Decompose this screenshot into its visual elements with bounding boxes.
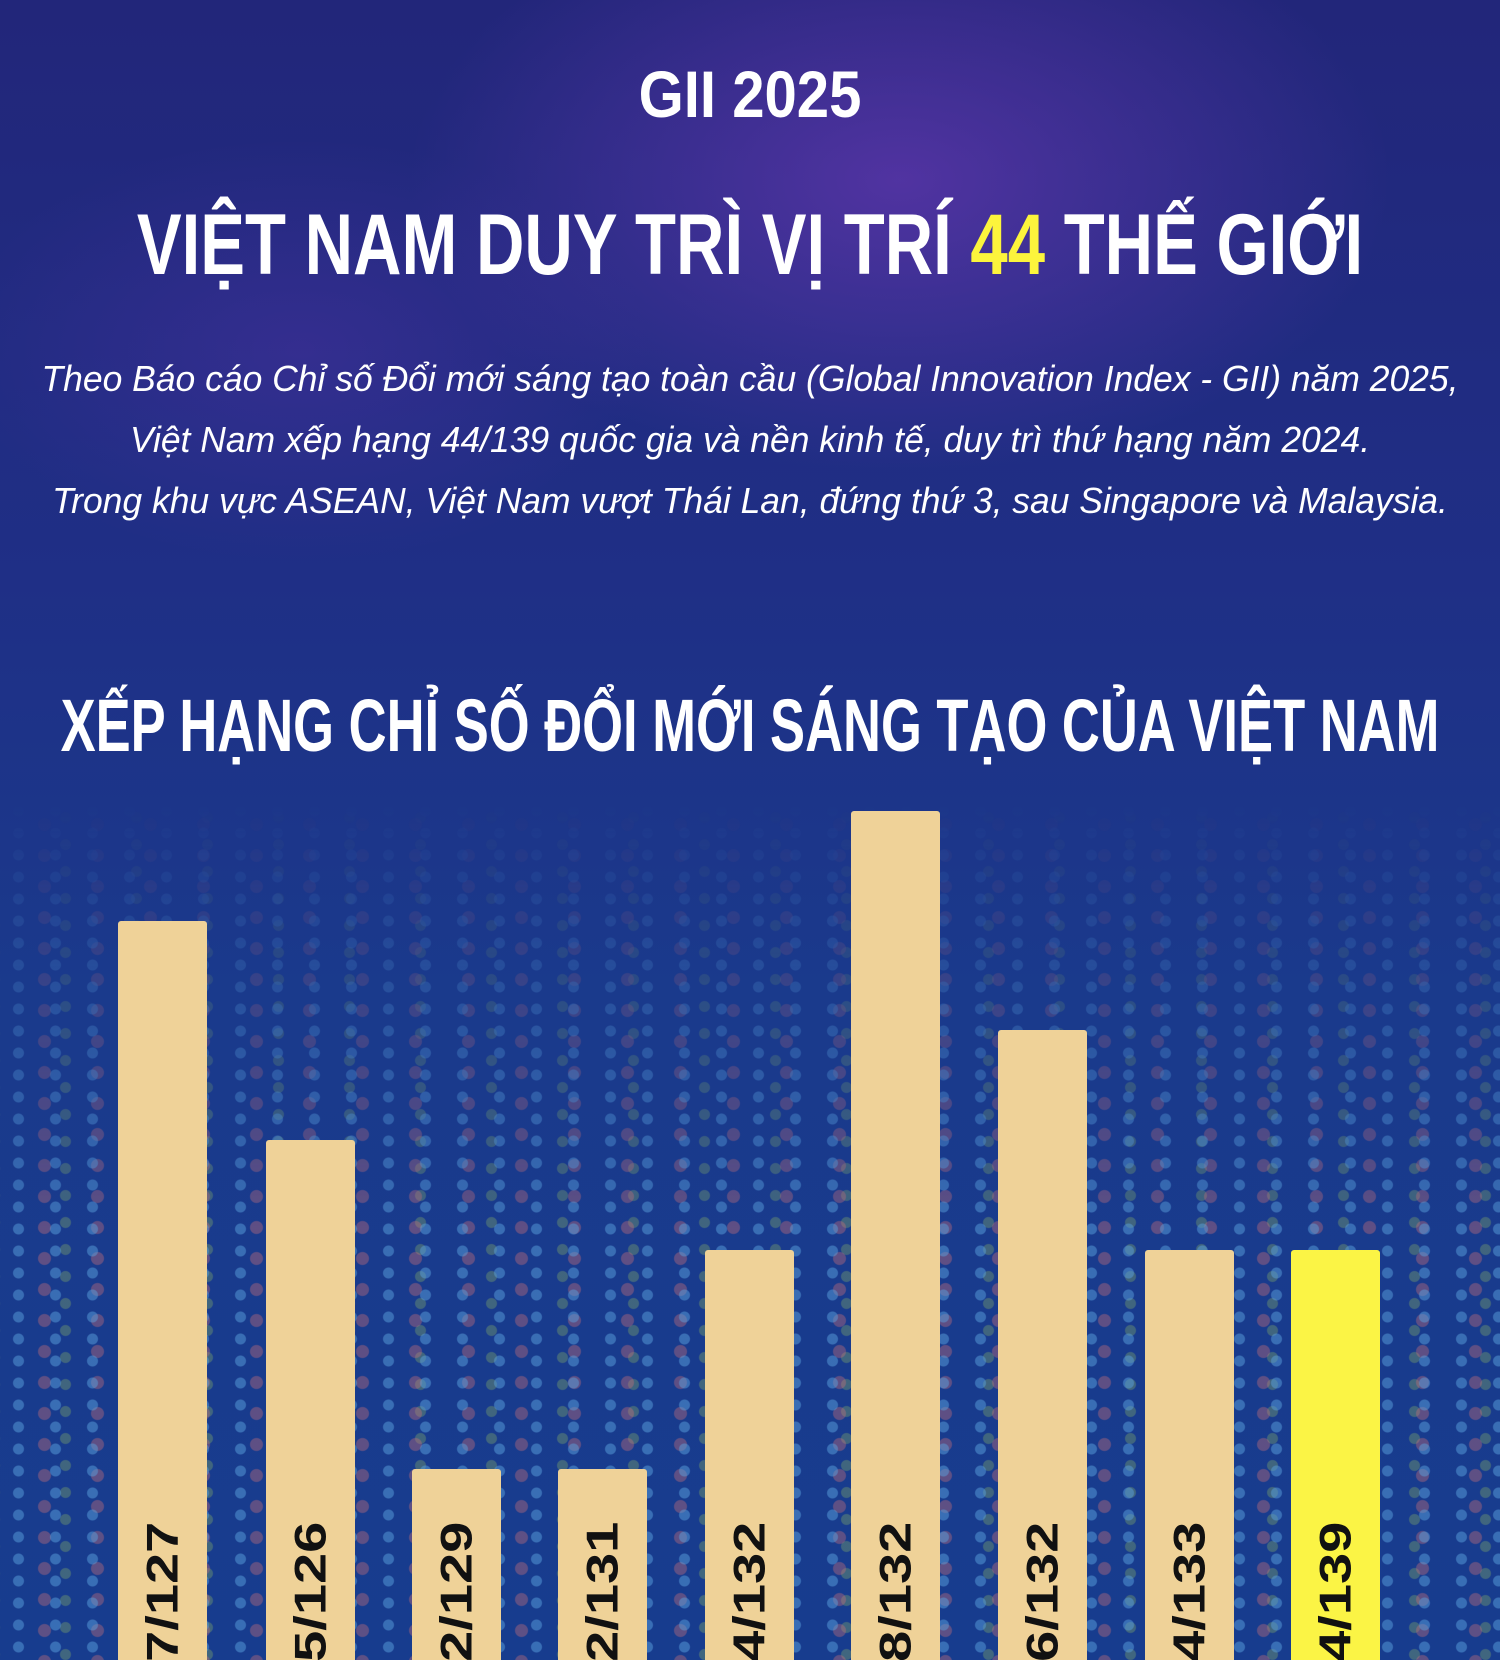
bar: 46/132 (998, 1030, 1087, 1660)
bar: 45/126 (266, 1140, 355, 1660)
intro text: Trong khu vực ASEAN, Việt Nam vượt Thái Lan, đứng thứ 3, sau Singapore và Malaysia. (52, 480, 1448, 521)
title: VIỆT NAM DUY TRÌ VỊ TRÍ 44 THẾ GIỚI (137, 197, 1363, 293)
bar: 44/139 highlighted (1291, 1250, 1380, 1660)
heading: GII 2025: GII 2025 (639, 57, 861, 131)
intro text: Theo Báo cáo Chỉ số Đổi mới sáng tạo toàn cầu (Global Innovation Index - GII) năm 2025, (42, 358, 1458, 399)
bar: 48/132 (851, 811, 940, 1660)
bar: 44/133 (1145, 1250, 1234, 1660)
bar: 42/131 (558, 1469, 647, 1660)
intro text: Việt Nam xếp hạng 44/139 quốc gia và nền kinh tế, duy trì thứ hạng năm 2024. (130, 419, 1370, 460)
bar: 47/127 (118, 921, 207, 1660)
bar chart (118, 811, 1380, 1660)
section heading: XẾP HẠNG CHỈ SỐ ĐỔI MỚI SÁNG TẠO CỦA VIỆT NAM (61, 684, 1439, 767)
intro text (42, 358, 1458, 521)
bar: 42/129 (412, 1469, 501, 1660)
bar: 44/132 (705, 1250, 794, 1660)
